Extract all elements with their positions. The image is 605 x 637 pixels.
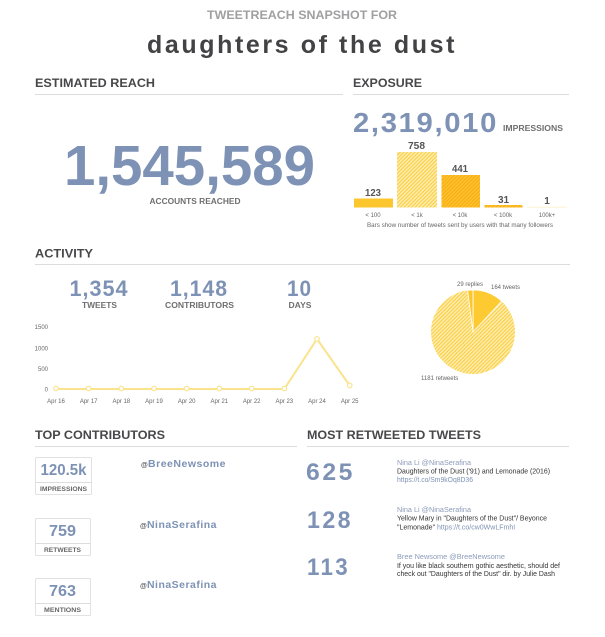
tweet: 113 retweets: If you like black southern gothic aesthetic, should def [397,563,560,570]
panel: estimated reach: 1,545,589 [64,134,315,198]
contributor: retweets [36,518,217,556]
stat: days: 10 [287,276,312,301]
pie chart: tweet types: 29 replies [457,282,483,288]
tweet: 128 retweets: 128 [307,507,353,534]
line chart: tweets per day: Apr 22 [243,399,261,405]
line chart: tweets per day [35,325,359,405]
line chart: tweets per day: Apr 20 [178,399,196,405]
bar chart: tweets by follower count [354,141,567,229]
tweet: 113 retweets: Bree Newsome @BreeNewsome [397,554,505,561]
contributor: mentions: 763 [49,583,76,600]
contributor: impressions: @ [141,462,148,469]
panel: estimated reach [35,78,343,206]
tweet: 128 retweets [307,507,547,534]
tweet: 113 retweets: check out "Daughters of the Dust" dir. by Julie Dash [397,571,555,578]
line chart: tweets per day: Apr 24 [308,399,326,405]
panel: exposure: EXPOSURE [353,78,422,90]
bar chart: tweets by follower count: 441 [452,164,468,175]
bar chart: tweets by follower count: < 100 [365,213,381,219]
line chart: tweets per day: 1500 [35,325,49,331]
stat: tweets: 1,354 [70,276,128,301]
bar chart: tweets by follower count: 100k+ [539,213,556,219]
tweet: 128 retweets: "Lemonade" https://t.co/cw0WwLFmhI [397,524,515,532]
contributor: retweets: 759 [49,523,76,540]
pie chart: tweet types: 1181 retweets [421,376,458,382]
tweet: 625 retweets: https://t.co/Sm9kOq8D36 [397,477,473,484]
panel: exposure [353,78,569,229]
line chart: tweets per day: Apr 16 [47,399,65,405]
panel: exposure: IMPRESSIONS [503,124,564,133]
tweet: 113 retweets [307,554,560,581]
panel: activity: ACTIVITY [35,248,93,260]
panel: estimated reach: ACCOUNTS REACHED [150,197,241,206]
tweet: 625 retweets: Daughters of the Dust ('91) and Lemonade (2016) [397,468,550,476]
contributor: impressions: 120.5k [40,462,87,479]
contributor: impressions: BreeNewsome [148,458,226,470]
line chart: tweets per day: Apr 18 [112,399,131,405]
header: report title: daughters of the dust [147,31,457,59]
stat: contributors: CONTRIBUTORS [165,301,235,310]
tweet: 625 retweets: 625 [306,459,355,486]
panel: top contributors: TOP CONTRIBUTORS [35,430,165,442]
panel: most retweeted tweets [306,430,569,581]
line chart: tweets per day: 500 [38,367,49,373]
stat: tweets: TWEETS [82,301,118,310]
bar chart: tweets by follower count: 31 [498,195,509,206]
contributor: mentions: NinaSerafina [147,579,217,591]
bar chart: tweets by follower count: < 10k [453,213,468,219]
contributor: mentions [36,578,217,616]
pie chart: tweet types: 164 tweets [491,285,520,291]
contributor: retweets: NinaSerafina [147,519,217,531]
panel: estimated reach: ESTIMATED REACH [35,78,155,90]
line chart: tweets per day: Apr 23 [275,399,294,405]
contributor: mentions: MENTIONS [44,607,82,614]
pie chart: tweet types [421,282,520,382]
contributor: retweets: @ [140,523,147,530]
bar chart: tweets by follower count: < 100k [494,213,513,219]
bar chart: tweets by follower count: 123 [365,188,381,199]
tweet: 625 retweets: Nina Li @NinaSerafina [397,460,471,467]
line chart: tweets per day: Apr 17 [80,399,98,405]
bar chart: tweets by follower count: 758 [408,141,425,152]
header: report title: TWEETREACH SNAPSHOT FOR [207,10,398,22]
line chart: tweets per day: Apr 25 [341,399,359,405]
bar chart: tweets by follower count: < 1k [411,213,424,219]
tweet: 128 retweets: Yellow Mary in "Daughters of the Dust"/ Beyonce [397,516,547,522]
panel: most retweeted tweets: MOST RETWEETED TWEETS [307,430,481,442]
bar chart: tweets by follower count: 1 [544,196,550,207]
line chart: tweets per day: 0 [45,388,49,394]
bar chart: tweets by follower count: Bars show number of tweets sent by users with that many followers [367,223,553,229]
stat: days: DAYS [288,301,312,310]
panel: activity [35,248,570,405]
line chart: tweets per day: Apr 21 [210,399,229,405]
contributor: impressions: IMPRESSIONS [40,486,88,493]
contributor: retweets: RETWEETS [44,547,82,554]
stat: contributors: 1,148 [170,276,228,301]
panel: exposure: 2,319,010 [353,107,498,138]
stat: contributors [165,276,235,310]
line chart: tweets per day: 1000 [35,346,49,352]
panel: top contributors [35,430,297,616]
tweet: 128 retweets: Nina Li @NinaSerafina [397,507,471,514]
header: report title [147,10,457,59]
tweet: 625 retweets [306,459,550,486]
contributor: mentions: @ [140,583,147,590]
contributor: impressions [36,458,226,494]
line chart: tweets per day: Apr 19 [145,399,163,405]
tweet: 113 retweets: 113 [307,554,350,581]
